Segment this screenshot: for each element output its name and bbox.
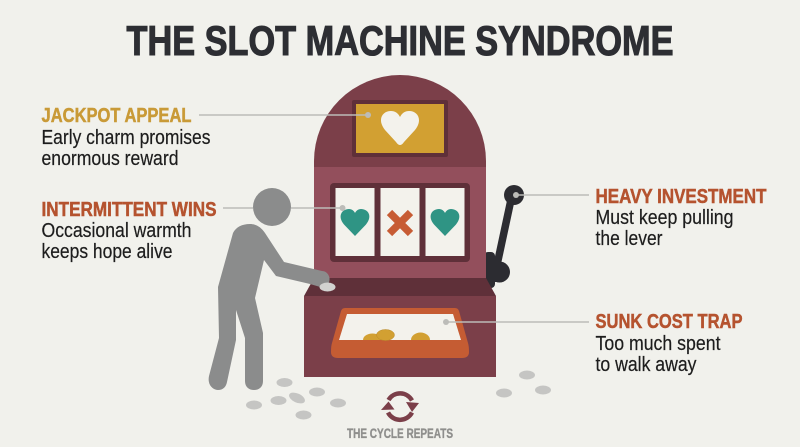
lever <box>484 185 524 288</box>
callout: sunk cost trap: SUNK COST TRAP <box>596 311 742 333</box>
callout: intermittent wins: Occasional warmth <box>42 220 192 242</box>
callout: intermittent wins: keeps hope alive <box>42 241 172 263</box>
cabinet base <box>304 296 496 377</box>
coin tray <box>331 308 469 358</box>
footer caption: THE CYCLE REPEATS <box>347 426 453 441</box>
gold coins <box>363 334 382 340</box>
title: THE SLOT MACHINE SYNDROME <box>126 17 674 64</box>
jackpot display <box>352 100 448 157</box>
callout: jackpot appeal: Early charm promises <box>42 127 210 149</box>
callout: jackpot appeal: JACKPOT APPEAL <box>42 105 192 127</box>
callout: heavy investment <box>513 186 766 250</box>
callout: sunk cost trap: Too much spent <box>596 333 721 355</box>
callout: jackpot appeal: enormous reward <box>42 148 178 170</box>
callout: intermittent wins <box>42 199 346 263</box>
callout: sunk cost trap <box>443 311 742 376</box>
icon: orange cross <box>390 212 410 234</box>
cabinet dome <box>314 75 486 167</box>
reels <box>330 183 470 262</box>
callout: heavy investment: HEAVY INVESTMENT <box>596 186 766 208</box>
callout: intermittent wins: INTERMITTENT WINS <box>42 199 216 221</box>
slot machine <box>304 75 524 377</box>
icon: teal heart left <box>341 209 369 236</box>
ledge <box>304 278 496 296</box>
icon: teal heart right <box>431 209 459 236</box>
icon: cycle arrows <box>381 393 419 420</box>
coin under hand <box>320 282 336 292</box>
callout: jackpot appeal <box>42 105 371 170</box>
scattered coins <box>246 370 551 420</box>
person silhouette <box>209 188 330 390</box>
cabinet body <box>314 167 486 279</box>
callout: sunk cost trap: to walk away <box>596 354 696 376</box>
callout: heavy investment: Must keep pulling <box>596 207 734 229</box>
callout: heavy investment: the lever <box>596 228 663 250</box>
